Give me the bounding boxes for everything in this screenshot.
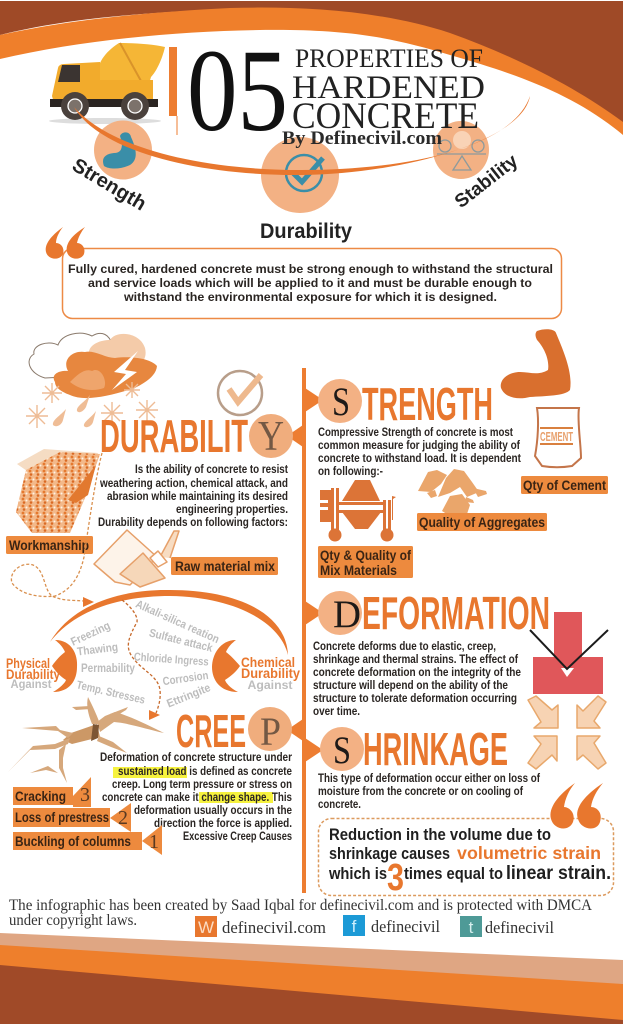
label: physical durability <box>6 656 60 691</box>
heading: deformation: D <box>333 593 361 636</box>
label: workmanship: Workmanship <box>9 538 89 553</box>
label: chemical durability: Durability <box>241 666 300 681</box>
label: qty and quality of mix materials <box>318 546 413 578</box>
icon: cement bag: CEMENT <box>540 429 573 444</box>
list: physical durability attacks: Permability <box>81 663 136 675</box>
social: facebook: definecivil <box>371 917 440 936</box>
list: excessive creep causes <box>13 777 162 855</box>
callout: volumetric strain: 3 <box>387 857 404 899</box>
title: PROPERTIES OF <box>295 44 483 73</box>
text: deformation description: over time. <box>313 706 360 718</box>
list: chemical durability attacks: Alkali-silica reation <box>134 598 221 646</box>
list: chemical durability attacks: Sulfate attack <box>148 627 214 655</box>
social: twitter <box>460 916 554 937</box>
icon: cement bag <box>535 408 581 467</box>
label: chemical durability: Against <box>248 680 293 692</box>
social: website: definecivil.com <box>222 918 326 937</box>
list: excessive creep causes: Buckling of columns <box>15 834 131 849</box>
callout: volumetric strain: linear strain. <box>506 863 611 884</box>
arc joining physical and chemical durability <box>50 590 288 655</box>
label: chemical durability: Chemical <box>241 655 295 670</box>
heading: shrinkage <box>320 723 508 775</box>
title: By Definecivil.com <box>282 128 442 149</box>
icon: sand and shovel <box>94 530 179 587</box>
copyright note: under copyright laws. <box>9 912 137 929</box>
circle: stability <box>433 121 489 179</box>
icon: concrete mixer <box>320 480 396 542</box>
text: deformation description: Concrete deforms due to elastic, creep, <box>313 641 496 653</box>
text: creep description <box>100 752 292 843</box>
text: shrinkage description: moisture from the concrete or on cooling of <box>318 786 523 798</box>
text: shrinkage description <box>318 773 540 811</box>
intro quote panel: Fully cured, hardened concrete must be strong enough to withstand the structural <box>68 264 553 276</box>
text: deformation description: concrete deformation on the integrity of the <box>313 667 521 679</box>
text: shrinkage description: concrete. <box>318 799 361 811</box>
list: excessive creep causes: 3 <box>80 784 90 806</box>
text: creep description: Deformation of concrete structure under <box>100 752 292 764</box>
list: physical durability attacks: Freezing <box>69 620 112 649</box>
heading: durability: Y <box>258 414 284 460</box>
list: physical durability attacks: Temp. Stresses <box>75 679 146 707</box>
label: qty and quality of mix materials: Qty & Quality of <box>320 548 411 563</box>
list: physical durability attacks <box>69 620 146 707</box>
orange divider bar <box>169 47 178 135</box>
circle: durability <box>261 137 339 213</box>
label: physical durability: Durability <box>6 667 60 682</box>
label: durability: Durability <box>260 220 352 243</box>
title: 05 <box>187 25 288 156</box>
text: durability description: Is the ability of concrete to resist <box>135 464 288 476</box>
text: creep description: direction the force is applied. <box>154 818 292 830</box>
heading: shrinkage: HRINKAGE <box>363 723 508 775</box>
intro quote panel: withstand the environmental exposure for which it is designed. <box>123 292 497 304</box>
list: excessive creep causes: Cracking <box>15 789 66 804</box>
text: deformation description: shrinkage and thermal strains. The effect of <box>313 654 518 666</box>
list: chemical durability attacks <box>133 598 221 710</box>
icon: concrete mixer truck <box>49 43 165 124</box>
list: physical durability attacks: Thawing <box>77 642 119 658</box>
heading: deformation <box>318 587 550 639</box>
header wave <box>0 1 623 135</box>
text: deformation description: structure will depend on the ability of the <box>313 680 508 692</box>
title: HARDENED <box>292 70 485 106</box>
icon: flexed arm <box>501 329 571 398</box>
icon: concrete workmanship <box>16 449 100 533</box>
text: strength description: Compressive Strength of concrete is most <box>318 427 513 439</box>
social: facebook <box>343 915 440 936</box>
text: durability description: weathering action, chemical attack, and <box>99 478 288 490</box>
text: creep description: concrete can make it change shape. This <box>102 792 292 804</box>
text: durability description: Durability depends on following factors: <box>98 517 288 529</box>
title: CONCRETE <box>292 96 479 137</box>
heading: strength <box>318 378 493 430</box>
list: excessive creep causes: 2 <box>118 807 128 829</box>
text: deformation description: structure to tolerate deformation occurring <box>313 693 517 705</box>
callout: volumetric strain: which is <box>328 865 387 883</box>
icon: aggregates <box>418 469 487 518</box>
list: excessive creep causes: Loss of prestress <box>15 810 109 825</box>
social: facebook: f <box>352 917 357 936</box>
icon: concrete crack <box>8 697 164 783</box>
label: quality of aggregates: Quality of Aggregates <box>419 515 545 530</box>
copyright note: The infographic has been created by Saad Iqbal for definecivil.com and is protected with DMCA <box>9 897 593 914</box>
icon: four inward arrows <box>528 696 606 769</box>
intro quote panel: and service loads which will be applied to it and must be durable enough to <box>88 278 532 290</box>
label: physical durability: Physical <box>6 656 50 671</box>
dashed arrow: durability factors to physical durability <box>11 453 102 607</box>
callout: volumetric strain: shrinkage causes <box>329 845 450 863</box>
callout: volumetric strain: volumetric strain <box>457 843 601 863</box>
heading: strength: S <box>332 379 350 424</box>
intro quote panel <box>46 227 561 318</box>
text: creep description: sustained load is defined as concrete <box>118 766 292 778</box>
label: raw material mix: Raw material mix <box>175 559 275 574</box>
text: strength description: concrete to withstand load. It is dependent <box>318 453 521 465</box>
text: durability description <box>98 464 288 529</box>
central timeline <box>287 368 323 893</box>
text: strength description: common measure for judging the ability of <box>318 440 520 452</box>
circle: strength <box>94 120 152 180</box>
social: twitter: t <box>469 918 474 937</box>
text: strength description <box>318 427 521 478</box>
bracket: physical durability <box>52 640 77 692</box>
label: strength: Strength <box>68 154 150 215</box>
list: chemical durability attacks: Ettringite <box>165 682 212 710</box>
copyright note <box>9 897 593 929</box>
text: deformation description <box>313 641 521 718</box>
icon: check mark <box>218 371 262 415</box>
heading: creep: CREE <box>176 705 246 757</box>
text: creep description: creep. Long term pressure or stress on <box>112 779 292 791</box>
list: chemical durability attacks: Corrosion <box>162 670 209 688</box>
label: chemical durability <box>241 655 300 692</box>
callout: volumetric strain: Reduction in the volume due to <box>329 826 551 844</box>
label: qty of cement: Qty of Cement <box>523 478 606 493</box>
label: physical durability: Against <box>10 679 52 691</box>
text: durability description: engineering properties. <box>176 504 288 516</box>
heading: durability: DURABILIT <box>100 410 248 462</box>
social: twitter: definecivil <box>485 918 554 937</box>
dashed arrow: durability branches to creep <box>122 600 160 720</box>
list: chemical durability attacks: Chloride Ingress <box>133 651 209 669</box>
text: durability description: abrasion while maintaining its desired <box>107 491 288 503</box>
list: excessive creep causes: 1 <box>149 831 159 853</box>
text: creep description: deformation usually occurs in the <box>134 805 292 817</box>
callout: volumetric strain <box>318 783 614 899</box>
footer bands <box>0 933 623 1024</box>
text: creep description: Excessive Creep Causes <box>183 831 292 843</box>
social: website: W <box>198 918 214 937</box>
bracket: chemical durability <box>212 640 240 692</box>
callout: volumetric strain: times equal to <box>404 865 503 883</box>
label: stability: Stability <box>451 150 523 213</box>
icon: load on deforming block <box>530 612 608 694</box>
heading: shrinkage: S <box>333 729 351 772</box>
heading: creep: P <box>260 709 281 754</box>
text: shrinkage description: This type of deformation occur either on loss of <box>318 773 540 785</box>
label: qty and quality of mix materials: Mix Materials <box>320 563 397 578</box>
icon: rain drops and frost <box>26 382 158 428</box>
title <box>187 25 485 156</box>
heading: strength: TRENGTH <box>362 378 493 430</box>
icon: storm cloud <box>29 333 157 398</box>
text: strength description: on following:- <box>318 466 383 478</box>
curved arc connecting properties <box>74 96 530 175</box>
